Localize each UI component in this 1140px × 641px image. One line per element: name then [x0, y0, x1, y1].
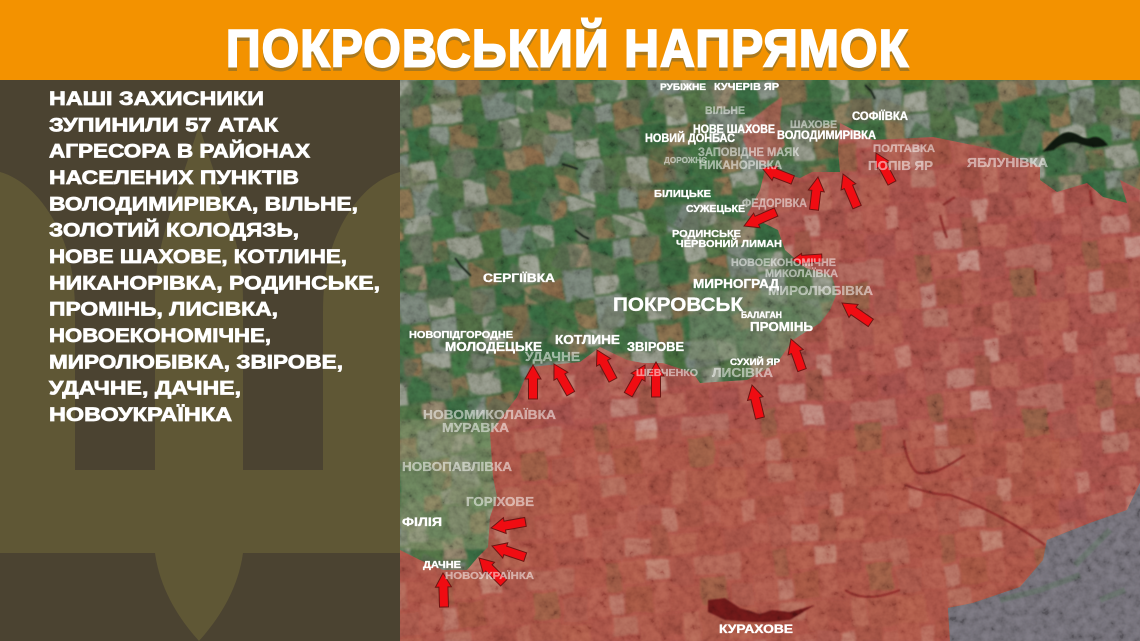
map labels [402, 81, 1049, 636]
attack arrows [435, 149, 899, 607]
label: МИКОЛАЇВКА [765, 267, 838, 280]
arrow: Myroliubivka [837, 296, 875, 329]
label: НОВИЙ ДОНБАС [645, 132, 735, 145]
arrow: Zvirove east [648, 362, 664, 397]
arrow: Volodymyrivka east [836, 171, 864, 210]
panel text: ЗОЛОТИЙ КОЛОДЯЗЬ, [49, 218, 299, 242]
label: КОТЛИНЕ [555, 332, 620, 347]
label: УДАЧНЕ [525, 350, 580, 364]
label: ПОЛТАВКА [873, 143, 935, 155]
label: ПРОМІНЬ [750, 320, 813, 334]
label: РОДИНСЬКЕ [672, 228, 741, 240]
label: МИРНОГРАД [693, 276, 780, 291]
label: ШЕВЧЕНКО [636, 367, 698, 379]
arrow: Udachne east [547, 360, 578, 398]
label: НОВОМИКОЛАЇВКА [423, 407, 557, 422]
header bar [0, 0, 1140, 80]
label: НОВЕ ШАХОВЕ [693, 124, 775, 136]
arrow: Novoekonomichne [792, 252, 822, 266]
arrow: Poltavka [869, 149, 899, 187]
map: satellite base [390, 70, 1140, 641]
label: ЛИСІВКА [712, 366, 773, 380]
panel text: УДАЧНЕ, ДАЧНЕ, [49, 378, 241, 400]
title: ПОКРОВСЬКИЙ НАПРЯМОК [226, 22, 908, 82]
label: БІЛИЦЬКЕ [654, 188, 711, 200]
label: МИРОЛЮБІВКА [768, 283, 874, 298]
label: КУРАХОВЕ [719, 622, 793, 636]
label: ЧЕРВОНИЙ ЛИМАН [676, 237, 782, 250]
red island near Nove Shakhove [743, 97, 785, 165]
arrow: Nykanorivka [759, 161, 796, 187]
label: ГОРІХОВЕ [466, 494, 534, 509]
label: ДАЧНЕ [423, 560, 461, 571]
title: ПОКРОВСЬКИЙ НАПРЯМОК [226, 18, 908, 78]
panel text: НОВЕ ШАХОВЕ, КОТЛИНЕ, [49, 246, 347, 268]
arrow: Horikhove north [490, 514, 527, 536]
label: НОВОУКРАЇНКА [445, 569, 534, 582]
panel text: МИРОЛЮБІВКА, ЗВІРОВЕ, [49, 351, 343, 373]
trident emblem [0, 125, 400, 641]
panel text: НАСЕЛЕНИХ ПУНКТІВ [49, 167, 299, 189]
panel text: НОВОЕКОНОМІЧНЕ, [49, 325, 271, 347]
arrow: Rodynske [741, 205, 779, 233]
arrow: Promin [783, 336, 810, 373]
panel text: ПРОМІНЬ, ЛИСІВКА, [49, 299, 278, 321]
label: СУЖЕЦЬКЕ [686, 203, 745, 215]
label: НОВОПІДГОРОДНЕ [409, 330, 513, 341]
label: КУЧЕРІВ ЯР [714, 81, 779, 93]
label: МУРАВКА [442, 420, 510, 435]
label: МОЛОДЕЦЬКЕ [445, 340, 542, 354]
label: СУХИЙ ЯР [730, 356, 781, 368]
label: ВІЛЬНЕ [705, 105, 745, 117]
river lines in farmland [440, 100, 740, 362]
label: ЯБЛУНІВКА [967, 155, 1049, 170]
panel text: ЗУПИНИЛИ 57 АТАК [49, 114, 278, 136]
panel text: НИКАНОРІВКА, РОДИНСЬКЕ, [49, 272, 380, 294]
small dark ponds [455, 85, 875, 276]
lake: top right reservoir [1042, 132, 1108, 152]
arrow: Novoukrainka [473, 552, 509, 588]
label: ПОКРОВСЬК [613, 295, 743, 316]
panel: left text panel with trident [0, 80, 400, 641]
label: ФІЛІЯ [402, 515, 442, 529]
label: БАЛАГАН [741, 310, 782, 320]
label: ЗАПОВІДНЕ МАЯК [698, 147, 800, 159]
label: ПОПІВ ЯР [868, 158, 933, 173]
label: ВОЛОДИМИРІВКА [777, 130, 876, 142]
panel text: НОВОУКРАЇНКА [49, 403, 232, 426]
arrow: Udachne west [525, 365, 541, 399]
label: ШАХОВЕ [790, 119, 837, 131]
unoccupied farmland [390, 70, 1140, 641]
label: ФЕДОРІВКА [742, 198, 807, 210]
panel text: АГРЕСОРА В РАЙОНАХ [49, 139, 310, 163]
occupied-area ravines [845, 190, 1092, 597]
panel text: ВОЛОДИМИРІВКА, ВІЛЬНЕ, [49, 193, 358, 215]
label: ЗВІРОВЕ [627, 339, 684, 354]
arrow: Kotlyne [590, 346, 620, 384]
label: СОФІЇВКА [852, 110, 908, 123]
arrow: Volodymyrivka west [806, 176, 826, 211]
label: НОВОПАВЛІВКА [402, 460, 512, 474]
label: НОВОЕКОНОМІЧНЕ [731, 257, 836, 269]
arrow: Horikhove south [489, 538, 528, 565]
reservoir near Kurakhove [708, 598, 815, 622]
label: НИКАНОРІВКА [699, 160, 782, 172]
occupied territory overlay [400, 123, 1140, 641]
arrow: Lysivka [744, 383, 768, 420]
texture grain [400, 80, 1140, 641]
urban area bottom right [948, 483, 1140, 641]
panel text: НАШІ ЗАХИСНИКИ [49, 88, 264, 110]
label: ДОРОЖНЄ [664, 155, 707, 165]
arrow: Dachne [435, 573, 452, 607]
panel text [49, 88, 380, 426]
arrow: Zvirove west [621, 361, 652, 399]
label: СЕРГІЇВКА [483, 270, 555, 285]
label: РУБІЖНЕ [660, 82, 706, 93]
